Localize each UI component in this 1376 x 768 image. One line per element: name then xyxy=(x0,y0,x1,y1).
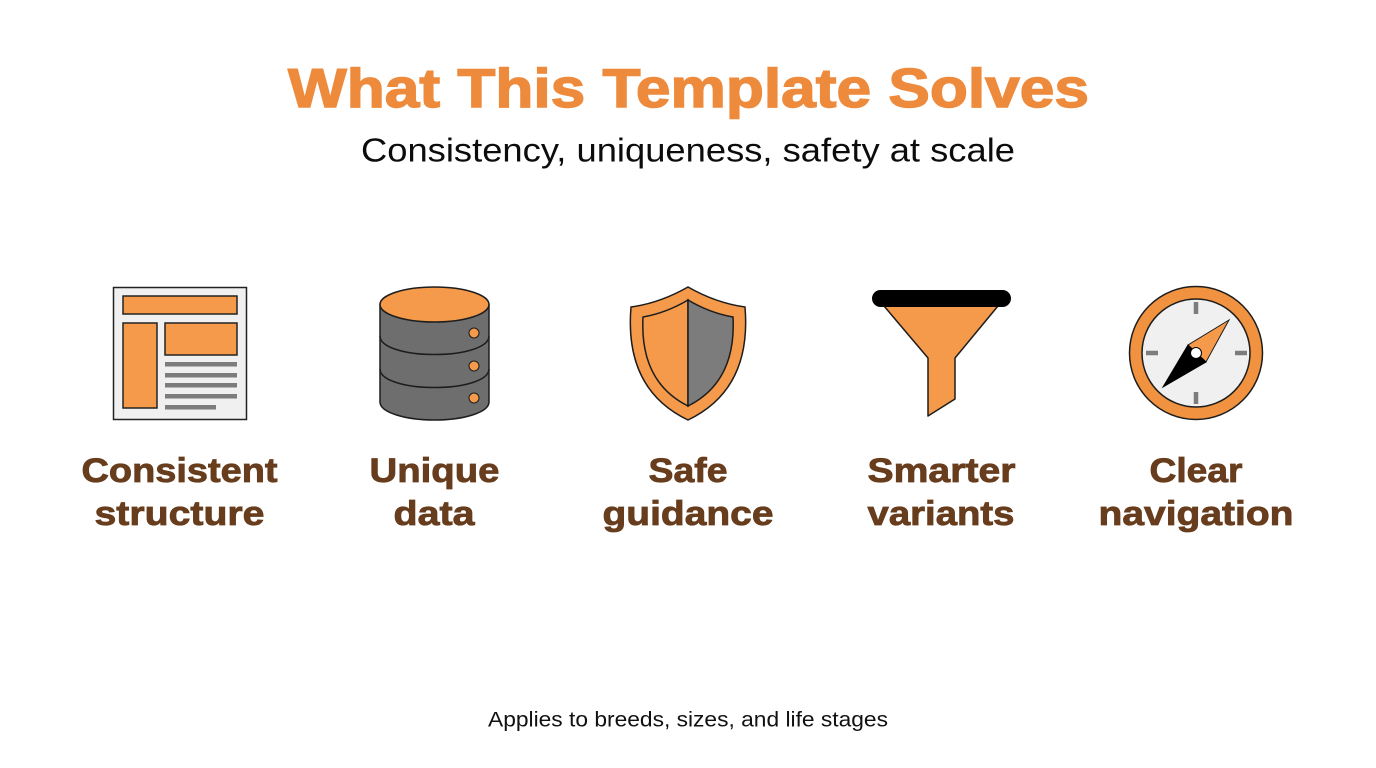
icon: shield xyxy=(630,287,746,420)
icon: funnel xyxy=(872,290,1011,416)
label: clear navigation: navigation xyxy=(1098,495,1294,533)
icon: page layout xyxy=(114,288,246,420)
label: clear navigation xyxy=(1098,452,1294,533)
label: unique data xyxy=(370,452,500,533)
label: smarter variants: Smarter xyxy=(868,452,1016,490)
footer note: Applies to breeds, sizes, and life stages xyxy=(488,708,888,732)
label: safe guidance: Safe xyxy=(648,452,728,490)
label: safe guidance xyxy=(602,452,774,533)
label: smarter variants: variants xyxy=(868,495,1014,533)
icon: database xyxy=(380,287,489,420)
label: consistent structure xyxy=(82,452,278,533)
label: smarter variants xyxy=(868,452,1016,533)
label: clear navigation: Clear xyxy=(1150,452,1242,490)
subtitle: Consistency, uniqueness, safety at scale xyxy=(361,132,1015,170)
label: consistent structure: structure xyxy=(94,495,264,533)
label: unique data: data xyxy=(394,495,475,533)
icon: compass xyxy=(1130,286,1262,420)
title: What This Template Solves xyxy=(288,57,1089,119)
label: safe guidance: guidance xyxy=(602,495,774,533)
label: unique data: Unique xyxy=(370,452,500,490)
label: consistent structure: Consistent xyxy=(82,452,278,490)
